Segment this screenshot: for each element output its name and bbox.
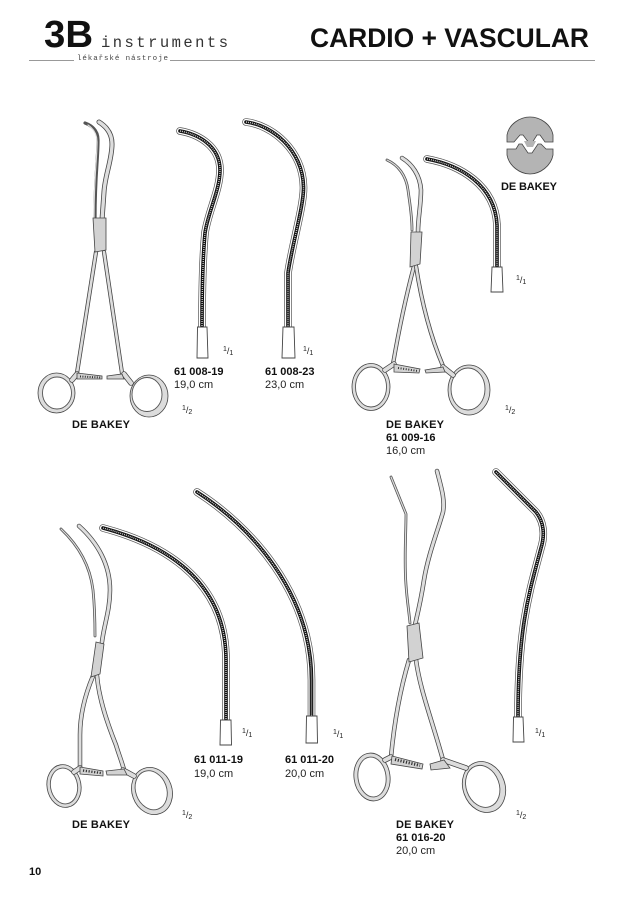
forceps: De Bakey bottom left bbox=[44, 526, 179, 820]
label: 61 011-19: 61 011-19 bbox=[194, 754, 243, 766]
label: De Bakey 61 016-20: 20,0 cm bbox=[396, 845, 435, 857]
label: De Bakey 61 016-20 bbox=[396, 819, 455, 857]
label: De Bakey 61 009-16 bbox=[386, 419, 445, 457]
jaw tip: 61 011-19 bbox=[103, 528, 232, 745]
scale: 1/2 for top left forceps: 1 bbox=[182, 405, 186, 412]
header: logo: 3B bbox=[44, 14, 93, 56]
scale: 1/2 for bottom left forceps: 2 bbox=[188, 814, 192, 821]
header: logo: lékařské nástroje bbox=[77, 55, 168, 63]
scale: 1/1 for 61 008-23: 1 bbox=[309, 350, 313, 357]
scale: 1/1 for 61 009-16: 1 bbox=[516, 275, 520, 282]
scale: 1/2 for bottom left forceps: / bbox=[186, 810, 189, 820]
jaw cross-section: De Bakey profile bbox=[507, 117, 553, 174]
scale: 1/1 for 61 011-20: 1 bbox=[333, 729, 337, 736]
scale: 1/1 for 61 008-19: 1 bbox=[223, 346, 227, 353]
label: 61 011-19 bbox=[194, 754, 243, 780]
label: 61 011-20: 61 011-20 bbox=[285, 754, 334, 766]
header: logo: instruments bbox=[101, 34, 228, 52]
scale: 1/2 for 61 009-16 forceps: 1 bbox=[505, 405, 509, 412]
jaw tip: 61 009-16 bbox=[427, 159, 503, 292]
label: De Bakey top left: DE BAKEY bbox=[72, 419, 131, 431]
label: 61 011-19: 19,0 cm bbox=[194, 768, 233, 780]
jaw tip: 61 016-20 bbox=[496, 472, 543, 742]
label: De Bakey 61 009-16: DE BAKEY bbox=[386, 419, 445, 431]
title: CARDIO + VASCULAR bbox=[310, 23, 589, 53]
label: De Bakey bottom left: DE BAKEY bbox=[72, 819, 131, 831]
label: 61 008-19: 19,0 cm bbox=[174, 379, 213, 391]
scale: 1/2 for 61 016-20 forceps: 1 bbox=[516, 810, 520, 817]
scale: 1/2 for top left forceps: 2 bbox=[188, 409, 192, 416]
scale: 1/1 for 61 011-20: 1 bbox=[339, 733, 343, 740]
label: 61 008-23 bbox=[265, 366, 315, 391]
scale: 1/1 for 61 016-20: 1 bbox=[541, 732, 545, 739]
forceps: De Bakey 61 009-16 bbox=[352, 158, 490, 415]
label: De Bakey 61 016-20: DE BAKEY bbox=[396, 819, 455, 831]
label: 61 011-20 bbox=[285, 754, 334, 780]
scale: 1/1 for 61 011-19: 1 bbox=[248, 732, 252, 739]
label: De Bakey 61 016-20: 61 016-20 bbox=[396, 832, 446, 844]
scale: 1/2 for 61 009-16 forceps: / bbox=[509, 405, 512, 415]
jaw tip: 61 011-20 bbox=[197, 492, 318, 743]
label: 61 008-19 bbox=[174, 366, 224, 391]
scale: 1/1 for 61 009-16: 1 bbox=[522, 279, 526, 286]
scale: 1/1 for 61 008-19: 1 bbox=[229, 350, 233, 357]
header: rule bbox=[29, 60, 595, 62]
page number: 10 bbox=[29, 866, 41, 878]
scale: 1/1 for 61 011-19: 1 bbox=[242, 728, 246, 735]
scale: 1/1 for 61 008-19: / bbox=[227, 346, 230, 356]
scale: 1/1 for 61 011-19: / bbox=[246, 728, 249, 738]
jaw tip: 61 008-23 bbox=[246, 122, 304, 358]
scale: 1/2 for 61 016-20 forceps: 2 bbox=[522, 814, 526, 821]
scale: 1/1 for 61 016-20: / bbox=[539, 728, 542, 738]
scale: 1/1 for 61 008-23: / bbox=[307, 346, 310, 356]
scale: 1/2 for 61 016-20 forceps: / bbox=[520, 810, 523, 820]
label: 61 011-20: 20,0 cm bbox=[285, 768, 324, 780]
label: De Bakey profile: DE BAKEY bbox=[501, 181, 558, 193]
scale: 1/1 for 61 008-23: 1 bbox=[303, 346, 307, 353]
label: 61 008-23: 61 008-23 bbox=[265, 366, 315, 378]
forceps: De Bakey 61 016-20 bbox=[351, 471, 513, 819]
label: De Bakey 61 009-16: 16,0 cm bbox=[386, 445, 425, 457]
scale: 1/2 for bottom left forceps: 1 bbox=[182, 810, 186, 817]
label: 61 008-23: 23,0 cm bbox=[265, 379, 304, 391]
scale: 1/1 for 61 009-16: / bbox=[520, 275, 523, 285]
label: De Bakey 61 009-16: 61 009-16 bbox=[386, 432, 436, 444]
scale: 1/2 for top left forceps: / bbox=[186, 405, 189, 415]
scale: 1/1 for 61 011-20: / bbox=[337, 729, 340, 739]
label: 61 008-19: 61 008-19 bbox=[174, 366, 224, 378]
forceps: De Bakey top left bbox=[38, 122, 168, 417]
scale: 1/2 for 61 009-16 forceps: 2 bbox=[511, 409, 515, 416]
scale: 1/1 for 61 016-20: 1 bbox=[535, 728, 539, 735]
header: logo bbox=[44, 14, 228, 63]
jaw tip: 61 008-19 bbox=[180, 131, 220, 358]
